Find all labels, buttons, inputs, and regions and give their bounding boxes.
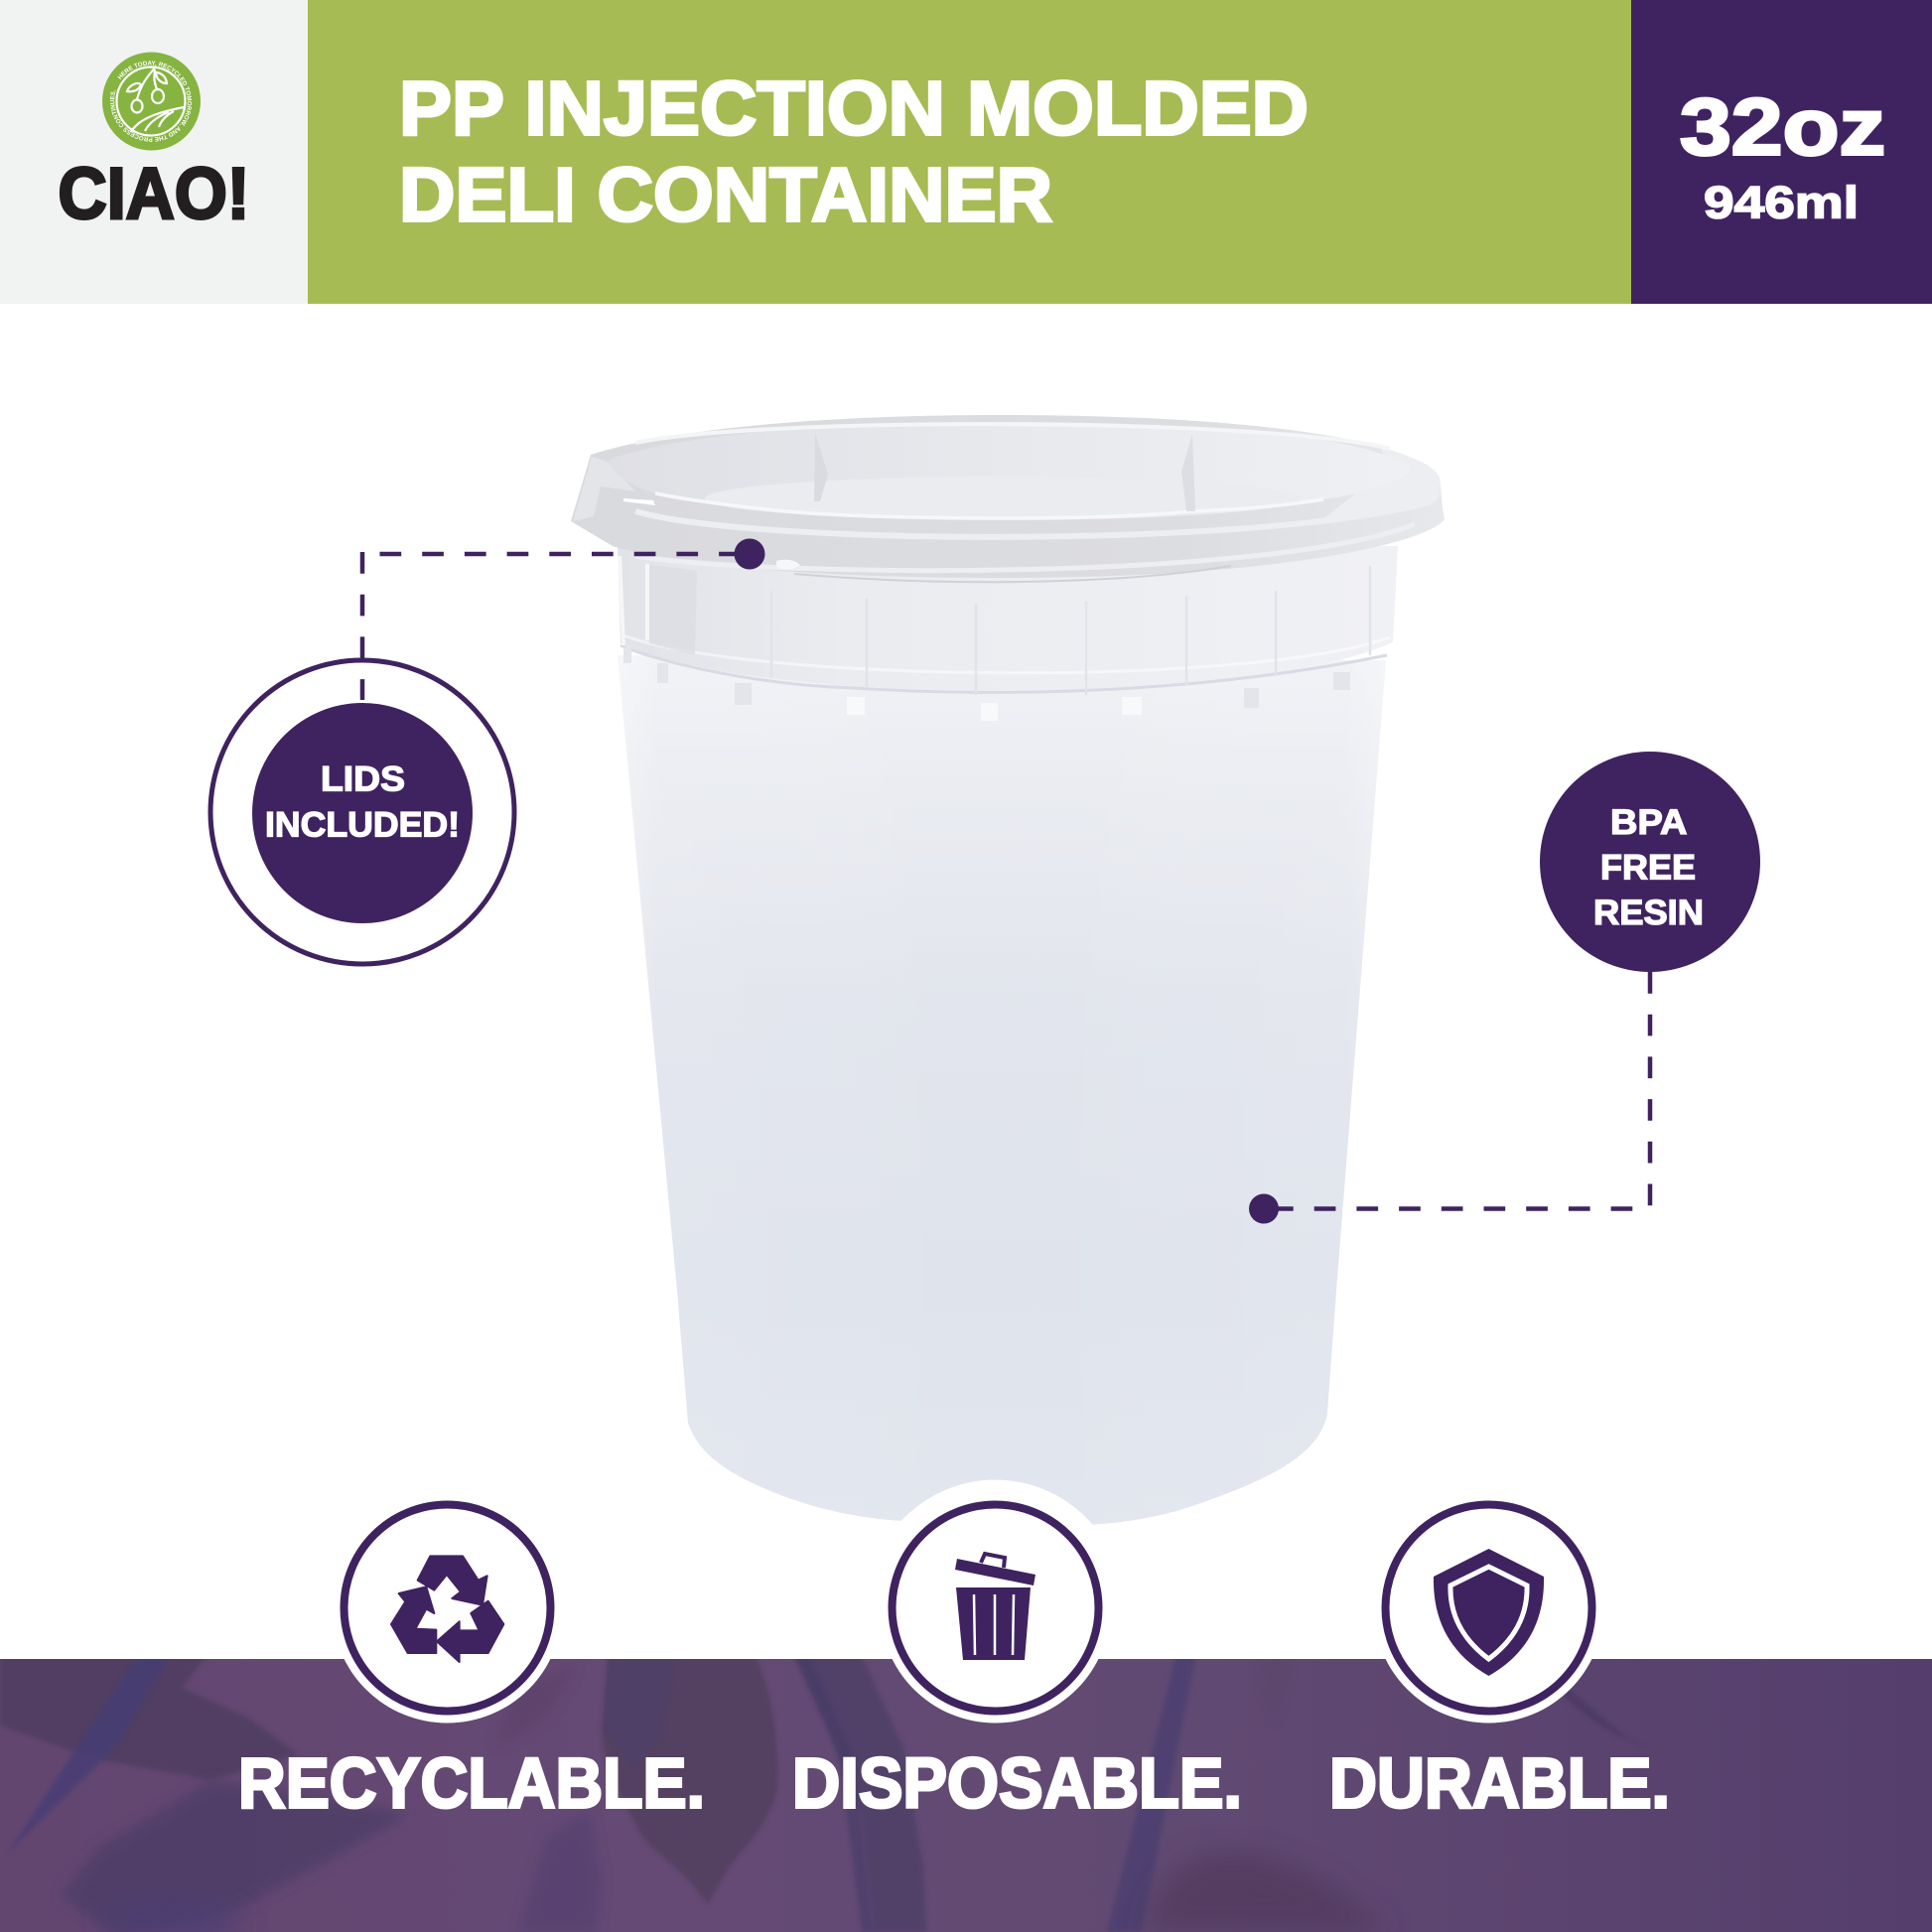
lid inner recess	[609, 422, 1410, 518]
icon: recycling arrows	[332, 1493, 562, 1724]
container body	[618, 655, 1386, 1525]
brand name: CIAO!	[58, 154, 250, 234]
badge	[1540, 752, 1760, 972]
lid outer rim	[571, 415, 1445, 578]
title: PP INJECTION MOLDED	[399, 66, 1309, 151]
logo badge: HERE TODAY, RECYCLED TOMORROW. AND THE PROCESS CONTINUES.	[109, 61, 193, 142]
capacity in ounces: 32oz	[1680, 83, 1885, 173]
header: logo panel	[0, 0, 308, 304]
callout text: LIDS	[321, 759, 405, 798]
callout text: RESIN	[1593, 893, 1704, 932]
bottom band with blurred leaves	[0, 1653, 1932, 1932]
upper collar of the container	[618, 546, 1398, 691]
halo behind disposable icon	[868, 1479, 1124, 1735]
outer ring	[210, 660, 514, 964]
feature: disposable	[792, 1493, 1242, 1823]
header: title panel	[308, 0, 1631, 304]
title: DELI CONTAINER	[399, 153, 1052, 238]
callout text: BPA	[1610, 802, 1687, 842]
callout leader line: vertical	[360, 552, 364, 700]
capacity in millilitres: 946ml	[1704, 177, 1859, 228]
callout: lids included	[210, 538, 764, 964]
callout anchor dot	[735, 538, 764, 570]
callout anchor dot	[1249, 1193, 1279, 1223]
icon: shield	[1374, 1493, 1604, 1724]
callout text: INCLUDED!	[265, 804, 460, 844]
product photo: deli container with lid	[571, 415, 1445, 1525]
callout leader line: horizontal	[379, 552, 740, 556]
lid ribs	[814, 433, 828, 501]
callout: BPA free resin	[1249, 752, 1760, 1223]
label: RECYCLABLE.	[238, 1745, 705, 1823]
label: DURABLE.	[1329, 1745, 1670, 1823]
retention tabs below collar	[623, 647, 1350, 708]
label: DISPOSABLE.	[792, 1745, 1242, 1823]
callout text: FREE	[1600, 848, 1696, 888]
feature: recyclable	[238, 1493, 705, 1823]
feature: durable	[1329, 1493, 1670, 1823]
lid highlights	[623, 498, 655, 505]
header: size panel	[1631, 0, 1932, 304]
callout leader line	[1271, 972, 1650, 1209]
inner badge	[252, 703, 473, 923]
icon: trash can	[880, 1493, 1110, 1724]
